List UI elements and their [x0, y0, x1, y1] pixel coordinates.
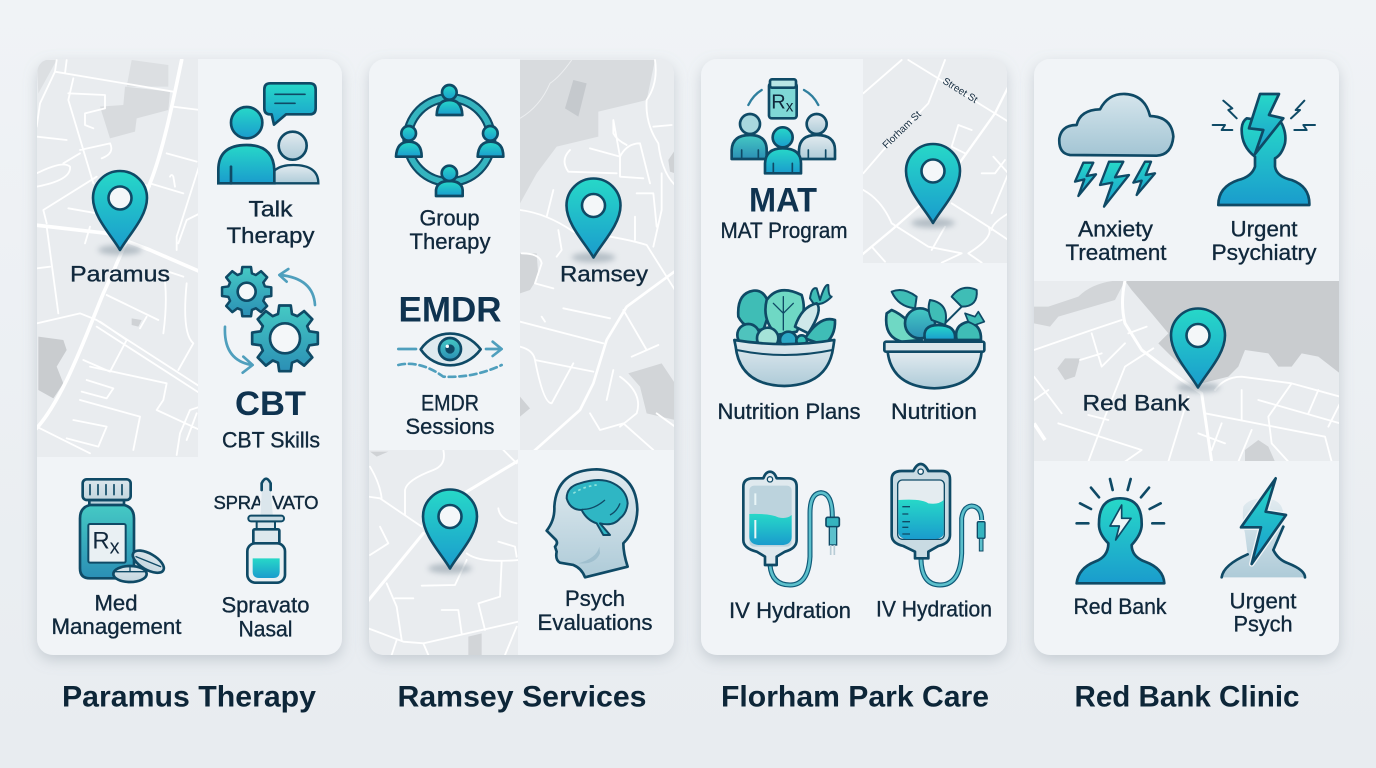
label: Talk Therapy: Therapy [226, 223, 315, 248]
label: Spravato Nasal: Spravato [222, 592, 310, 618]
label: Ramsey: Ramsey [560, 262, 649, 286]
label: EMDR Sessions [406, 390, 494, 439]
icon: bolt over head [1222, 478, 1305, 577]
label: Med Management [52, 590, 182, 639]
card: Paramus [37, 59, 342, 655]
map label: Florham St: Florham St [881, 109, 924, 151]
icon: vegetable bowl [734, 285, 835, 386]
label: Nutrition Plans: Nutrition Plans [718, 399, 860, 424]
icon: group therapy circle [396, 85, 503, 196]
label: Talk Therapy [226, 196, 315, 248]
label: EMDR Sessions: EMDR [421, 390, 479, 416]
icon: MAT group with Rx: x [786, 99, 794, 116]
text: EMDR: EMDR [398, 290, 502, 330]
label: IV Hydration right: IV Hydration [876, 596, 992, 622]
panel: Paramus Therapy [35, 59, 342, 655]
label: Group Therapy: Therapy [410, 229, 491, 254]
map: Ramsey upper [520, 59, 677, 452]
label: Psych Evaluations: Psych [565, 586, 625, 611]
label: Red Bank map: Red Bank [1082, 390, 1190, 416]
heading: Florham Park Care: Florham Park Care [721, 680, 989, 714]
icon: EMDR eye [398, 334, 502, 377]
icon: prescription bottle: x [110, 537, 120, 559]
label: EMDR Sessions: Sessions [406, 414, 494, 439]
label: MAT Program: MAT Program [720, 218, 848, 243]
label: Urgent Psychiatry [1212, 216, 1317, 265]
icon: MAT group with Rx: R [771, 92, 786, 114]
icon: CBT gears [222, 267, 318, 373]
icon: MAT group with Rx [732, 79, 835, 173]
icon: talk therapy [218, 83, 318, 183]
icon: prescription bottle [80, 479, 167, 582]
pin: Florham Park [906, 144, 960, 228]
label: Urgent Psych: Urgent [1230, 588, 1297, 614]
icon: IV bag left [743, 472, 839, 585]
label: Paramus: Paramus [70, 262, 170, 286]
label: Nutrition: Nutrition [891, 399, 977, 424]
label: Urgent Psych: Psych [1234, 612, 1292, 636]
map: Paramus [35, 59, 200, 457]
label: Med Management: Management [52, 614, 182, 639]
text: CBT: CBT [235, 385, 306, 423]
panel: Ramsey Services [367, 59, 677, 655]
label: Anxiety Treatment: Anxiety [1078, 216, 1154, 242]
pin: Red Bank [1171, 308, 1225, 392]
label: Anxiety Treatment: Treatment [1066, 240, 1167, 265]
icon: prescription bottle: R [92, 527, 110, 554]
panel: Red Bank Clinic [1034, 59, 1340, 655]
label: IV Hydration left: IV Hydration [729, 598, 851, 623]
card: Ramsey [369, 59, 674, 655]
text: Spravato brand: SPRA VATO [214, 492, 318, 513]
heading: Paramus Therapy: Paramus Therapy [62, 680, 316, 714]
icon: anxiety storm cloud [1059, 94, 1173, 207]
map: Florham Park [862, 59, 1008, 263]
pin: Paramus [93, 171, 147, 255]
panel: Florham Park Care [701, 59, 1008, 655]
label: Anxiety Treatment [1066, 216, 1167, 265]
label: CBT Skills: CBT Skills [222, 428, 320, 452]
label: Spravato Nasal [222, 592, 310, 642]
icon: head with bolt and rays [1077, 479, 1164, 583]
icon: urgent psychiatry head [1213, 94, 1315, 205]
heading: Red Bank Clinic: Red Bank Clinic [1074, 680, 1300, 714]
label: Psych Evaluations [538, 586, 652, 635]
map: Red Bank [1034, 281, 1340, 462]
pin: Ramsey [566, 178, 620, 262]
icon: nasal spray [247, 479, 285, 583]
label: Red Bank: Red Bank [1074, 594, 1167, 619]
label: Spravato Nasal: Nasal [238, 616, 292, 642]
map: Ramsey lower [367, 450, 518, 655]
label: Urgent Psychiatry: Urgent [1230, 216, 1298, 242]
text: MAT: MAT [749, 182, 817, 220]
label: Urgent Psychiatry: Psychiatry [1212, 240, 1317, 265]
label: Med Management: Med [94, 590, 138, 616]
icon: IV bag right [892, 464, 985, 585]
label: Group Therapy [410, 206, 491, 254]
pin: Ramsey lower [423, 490, 477, 574]
label: Psych Evaluations: Evaluations [538, 610, 652, 635]
label: Talk Therapy: Talk [248, 196, 293, 222]
icon: brain head [547, 469, 637, 577]
heading: Ramsey Services: Ramsey Services [398, 680, 646, 714]
label: Group Therapy: Group [420, 206, 480, 230]
map label: Street St: Street St [940, 76, 979, 106]
icon: fruit bowl [884, 288, 984, 388]
card: Florham Park [701, 59, 1007, 655]
card: Red Bank [1034, 59, 1339, 655]
label: Urgent Psych [1230, 588, 1297, 636]
